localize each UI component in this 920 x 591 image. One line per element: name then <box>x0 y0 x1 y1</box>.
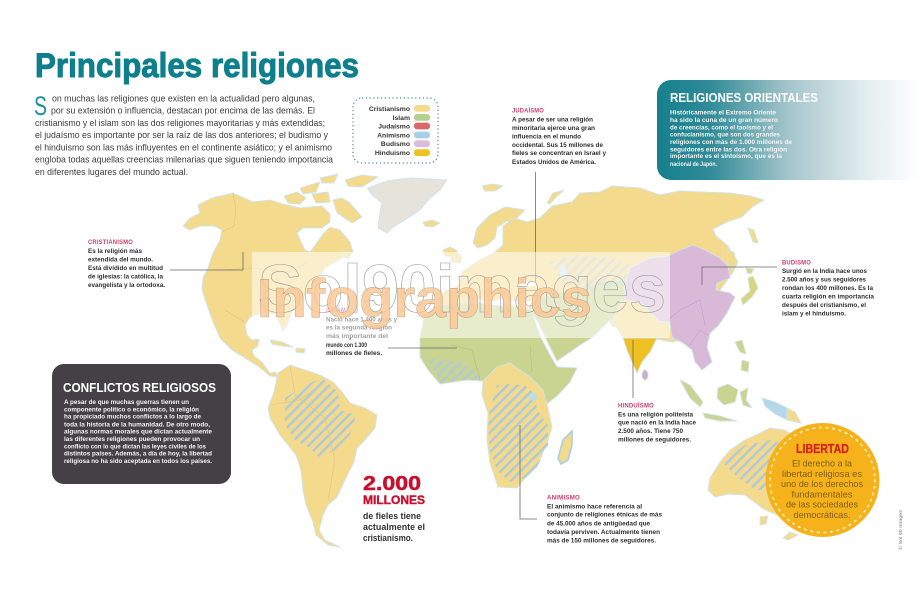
map: Buddhism in China and Southeast Asia <box>624 245 735 370</box>
callout: Cristianismo <box>88 239 165 289</box>
intro text: S <box>34 91 47 121</box>
map: South America animist hatch <box>285 378 356 458</box>
callout: Cristianismo: CRISTIANISMO <box>88 239 133 246</box>
map: Greenland <box>367 178 447 233</box>
callout: 2.000 millones: 2.000 <box>363 473 421 495</box>
panel: Conflictos religiosos: CONFLICTOS RELIGIOSOS <box>63 380 216 395</box>
callout: Judaísmo <box>512 106 606 166</box>
panel: Conflictos religiosos: toda la historia de la humanidad. De otro modo, <box>64 421 210 428</box>
map: inland seas <box>498 226 566 401</box>
callout: Hinduismo <box>618 400 696 444</box>
callout text: Islam: millones de fieles. <box>326 350 382 357</box>
callout: Cristianismo: extendida del mundo. <box>88 256 153 264</box>
callout: 2.000 millones: actualmente el <box>363 522 425 532</box>
legend: Judaísmo <box>378 124 410 130</box>
panel: Conflictos religiosos: algunas normas morales que dictan actualmente <box>64 429 212 436</box>
panel: Conflictos religiosos: conflicto con lo que dictan las leyes civiles de los <box>64 443 206 450</box>
map: Madagascar <box>558 431 572 464</box>
callout: Cristianismo: evangelista y la ortodoxa. <box>88 282 165 289</box>
callout: Animismo <box>547 494 662 545</box>
panel: Religiones orientales: Históricamente el Extremo Oriente <box>670 110 776 116</box>
callout: Libertad: libertad religiosa es <box>782 469 862 480</box>
panel: Religiones orientales: RELIGIONES ORIENTALES <box>670 91 818 105</box>
callout: Hinduismo: 2.500 años. Tiene 750 <box>618 428 683 435</box>
map: Indonesia and Philippines <box>680 340 752 421</box>
panel: Conflictos religiosos: componente político o económico, la religión <box>64 406 199 413</box>
callout: 2.000 millones: de fieles tiene <box>363 511 421 521</box>
callout: Hinduismo: Es una religión politeísta <box>618 411 693 418</box>
panel: Religiones orientales <box>657 80 920 180</box>
map: Islam in Asia <box>528 280 628 361</box>
panel: Conflictos religiosos: las diferentes religiones pueden provocar un <box>64 436 200 443</box>
callout: Judaísmo: minoritaria ejerce una gran <box>512 125 595 132</box>
intro text: por su extensión o influencia, destacan por encima de las demás. El <box>51 105 315 116</box>
intro text: cristianismo y el islam son las dos religiones mayoritarias y más extendidas; <box>35 117 325 128</box>
callout: 2.000 millones: MILLONES <box>363 493 425 507</box>
intro text: el hinduismo son las más influyentes en el continente asiático; y el animismo <box>35 142 332 152</box>
callout text: Islam: es la segunda religión <box>326 324 392 332</box>
panel: Religiones orientales: ha sido la cuna de un gran número <box>670 117 778 124</box>
callout: Hinduismo: HINDUÍSMO <box>618 400 654 409</box>
panel: Religiones orientales: de creencias, como el taoísmo y el <box>670 124 773 132</box>
callout: Libertad <box>766 423 880 537</box>
world map <box>183 174 820 547</box>
callout: Libertad: de las sociedades <box>786 500 858 511</box>
panel: Conflictos religiosos: distintos países. Además, a día de hoy, la libertad <box>64 451 212 458</box>
callout: Animismo: todavía perviven. Actualmente tienen <box>547 529 660 536</box>
callout: 2.000 millones <box>363 473 425 543</box>
legend: Budismo <box>381 141 410 148</box>
leader lines <box>170 172 777 519</box>
callout: 2.000 millones: cristianismo. <box>363 533 413 543</box>
intro text: en diferentes lugares del mundo actual. <box>35 166 188 177</box>
intro text <box>34 91 334 177</box>
callout: Animismo: de 45.000 años de antigüedad que <box>547 520 650 527</box>
panel: Religiones orientales: seguidores entre las dos. Otra religión <box>670 146 787 154</box>
watermark: Sol90images <box>258 251 666 327</box>
callout: Libertad: LIBERTAD <box>796 441 849 456</box>
legend: Islam <box>393 115 410 122</box>
callout text: Islam <box>326 307 397 357</box>
intro text: on muchas las religiones que existen en la actualidad pero algunas, <box>52 92 315 104</box>
callout: Hinduismo: millones de seguidores. <box>618 437 691 444</box>
callout: Animismo: El animismo hace referencia al <box>547 503 642 510</box>
callout: Animismo: conjunto de religiones étnicas de más <box>547 512 662 519</box>
panel: Conflictos religiosos: ha propiciado muchos conflictos a lo largo de <box>64 414 201 421</box>
callout text: Islam: ISLAM <box>326 307 346 314</box>
callout: Libertad: uno de los derechos <box>781 479 863 490</box>
map: Africa animist hatch <box>428 358 548 482</box>
callout: Budismo: rondan los 400 millones. Es la <box>782 285 873 292</box>
callout: Animismo: más de 150 millones de seguidores. <box>547 538 656 545</box>
callout text: Islam: Nació hace 1.400 años y <box>326 316 397 323</box>
callout: Cristianismo: Es la religión más <box>88 248 142 255</box>
callout: Judaísmo: occidental. Sus 15 millones de <box>512 142 603 149</box>
callout: Budismo: BUDISMO <box>782 259 811 266</box>
panel: Religiones orientales: religiones con más de 1.000 millones de <box>670 139 792 146</box>
map: Australia hatch <box>722 440 790 490</box>
callout: Libertad: fundamentales <box>792 490 853 501</box>
map: Europe and Asia <box>423 184 764 342</box>
panel: Conflictos religiosos: A pesar de que muchas guerras tienen un <box>64 399 189 406</box>
legend: Cristianismo <box>369 106 410 113</box>
legend: Hinduismo <box>375 150 410 157</box>
callout: Budismo: después del cristianismo, el <box>782 302 866 309</box>
map: Australia <box>708 428 820 540</box>
credit: © Sol 90 Images <box>897 509 904 550</box>
callout: Budismo: cuarta religión en importancia <box>782 294 874 301</box>
callout: Libertad: El derecho a la <box>792 458 853 469</box>
callout text: Islam: más importante del <box>326 333 388 340</box>
panel: Religiones orientales: confucianismo, que son dos grandes <box>670 132 780 138</box>
callout: Judaísmo: JUDAÍSMO <box>512 106 544 114</box>
legend: Animismo <box>377 132 410 140</box>
title: Principales religiones <box>35 47 359 85</box>
map: Korea and Japan <box>727 250 758 305</box>
intro text: el judaísmo es importante por ser la raíz de las dos anteriores; el budismo y <box>35 129 328 140</box>
panel: Religiones orientales: importante es el sintoísmo, que es la <box>670 153 782 160</box>
callout: Cristianismo: Está dividido en multitud <box>88 265 163 272</box>
legend <box>353 98 438 163</box>
panel: Religiones orientales: nacional de Japón. <box>670 161 717 168</box>
callout: Judaísmo: Estados Unidos de América. <box>512 159 596 166</box>
callout: Budismo <box>782 259 874 318</box>
callout: Budismo: Surgió en la India hace unos <box>782 268 867 275</box>
intro text: engloba todas aquellas creencias milenarias que siguen teniendo importancia <box>35 154 334 165</box>
map: Africa <box>420 303 577 488</box>
callout: Judaísmo: influencia en el mundo <box>512 134 581 140</box>
callout: Judaísmo: fieles se concentran en Israel y <box>512 150 606 157</box>
callout: Animismo: ANIMISMO <box>547 494 580 501</box>
panel: Conflictos religiosos: religiosa no ha sido aceptada en todos los países. <box>64 458 212 465</box>
map: India <box>612 300 672 380</box>
callout: Hinduismo: que nació en la India hace <box>618 420 696 427</box>
map: Central Asia hatch <box>550 255 632 290</box>
map: South America <box>268 365 377 547</box>
callout: Judaísmo: A pesar de ser una religión <box>512 116 593 124</box>
panel: Conflictos religiosos <box>52 364 231 484</box>
map: Papua <box>762 398 801 423</box>
callout text: Islam: mundo con 1.300 <box>326 342 367 349</box>
callout: Libertad: democráticas. <box>794 510 850 521</box>
callout: Budismo: 2.500 años y sus seguidores <box>782 277 866 284</box>
callout: Budismo: islam y el hinduismo. <box>782 311 846 318</box>
watermark: Infographics <box>257 267 592 329</box>
callout: Cristianismo: de iglesias: la católica, la <box>88 273 163 280</box>
map: North America <box>183 174 378 377</box>
